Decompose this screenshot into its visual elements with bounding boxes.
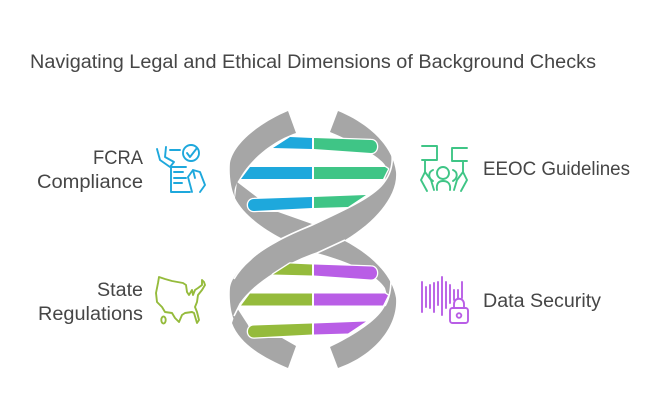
label: State Regulations: Regulations xyxy=(38,304,143,325)
DNA helix diagram xyxy=(230,111,396,368)
strand: main crossing xyxy=(230,111,396,322)
title: Navigating Legal and Ethical Dimensions of Background Checks xyxy=(30,52,596,73)
strand: upper left arc xyxy=(230,111,296,197)
icon: sound wave with padlock xyxy=(422,277,468,323)
strand: lower right arc xyxy=(317,240,396,368)
strand: back upper crossing xyxy=(235,182,312,238)
label: EEOC Guidelines: EEOC Guidelines xyxy=(483,159,630,180)
strand: lower left end xyxy=(232,308,296,368)
label: FCRA Compliance: Compliance xyxy=(37,172,143,193)
icon: person holding signs xyxy=(421,146,467,191)
label: Data Security: Data Security xyxy=(483,291,602,312)
label: FCRA Compliance xyxy=(37,148,143,193)
bars: blue and green rungs xyxy=(241,137,388,211)
bars: lime and purple rungs xyxy=(241,264,388,338)
icon: map of the United States xyxy=(156,277,205,324)
icon: document with hands and check xyxy=(157,145,205,192)
label: State Regulations: State xyxy=(97,280,143,301)
label: FCRA Compliance: FCRA xyxy=(93,148,143,169)
label: State Regulations xyxy=(38,280,143,325)
